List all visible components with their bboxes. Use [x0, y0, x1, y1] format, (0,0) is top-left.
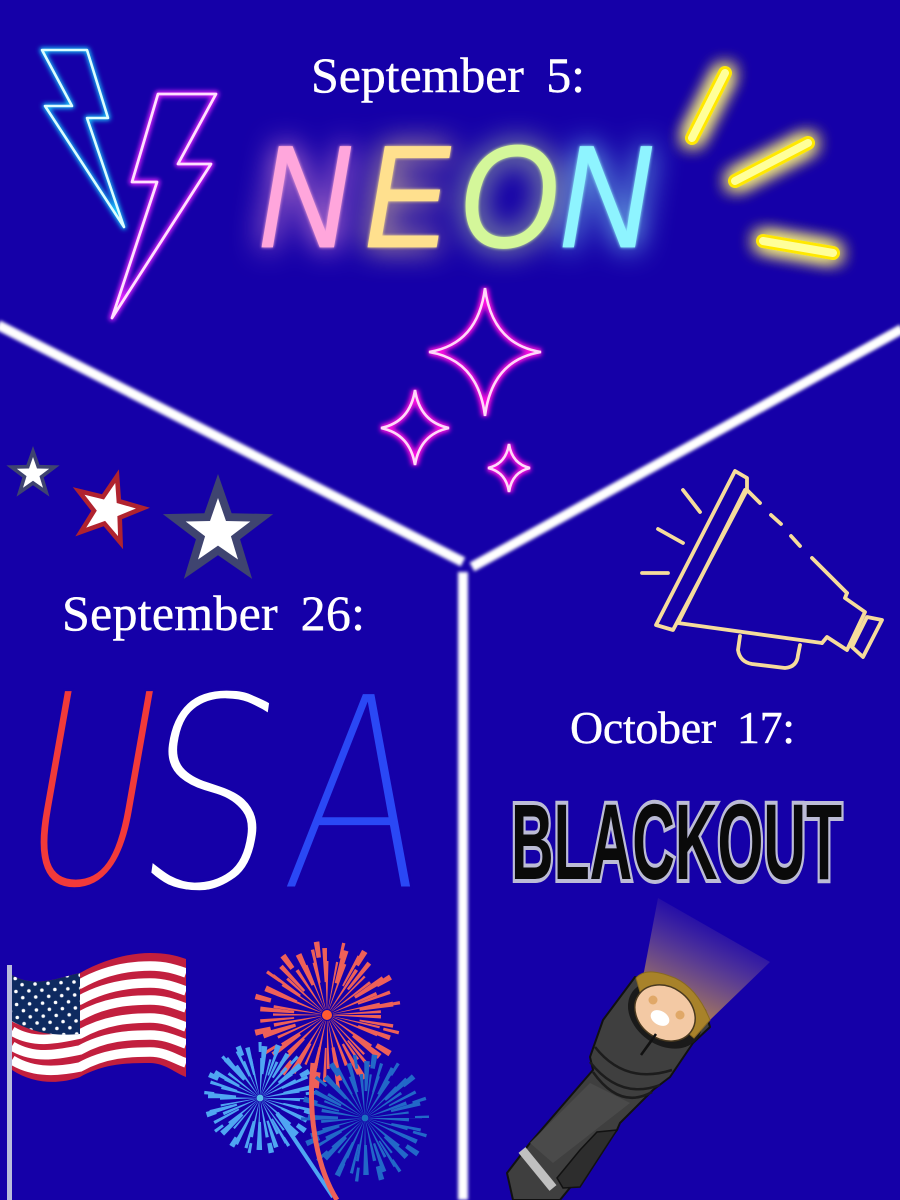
rocket trail [311, 1063, 337, 1200]
title: USA [0, 637, 444, 952]
icon: megaphone [642, 471, 882, 668]
panel dividers [0, 325, 900, 1200]
title: NEON [258, 116, 652, 279]
icon: neon sparkles [381, 288, 541, 492]
title: NEON: E [364, 116, 451, 279]
title: USA: A [272, 640, 444, 952]
date: October 17: October 17: [570, 702, 795, 753]
icon: fireworks [209, 949, 422, 1200]
light blue burst [209, 1047, 333, 1197]
icon: waving American flag [7, 945, 190, 1200]
icon: yellow neon dashes [692, 73, 833, 253]
icon: row of stars [6, 446, 273, 579]
dark blue burst [308, 1061, 422, 1175]
date: September 26: September 26: [62, 585, 365, 641]
title: NEON: N [258, 116, 351, 279]
title: USA: U [0, 637, 183, 949]
red burst [261, 949, 393, 1081]
date: September 5: September 5: [311, 47, 585, 103]
title: NEON: N [559, 116, 652, 279]
title: NEON: O [459, 116, 559, 279]
icon: magenta lightning bolt [112, 94, 216, 318]
title: USA: S [119, 640, 302, 952]
icon: flashlight [507, 898, 770, 1200]
icon: cyan lightning bolt [42, 50, 124, 227]
